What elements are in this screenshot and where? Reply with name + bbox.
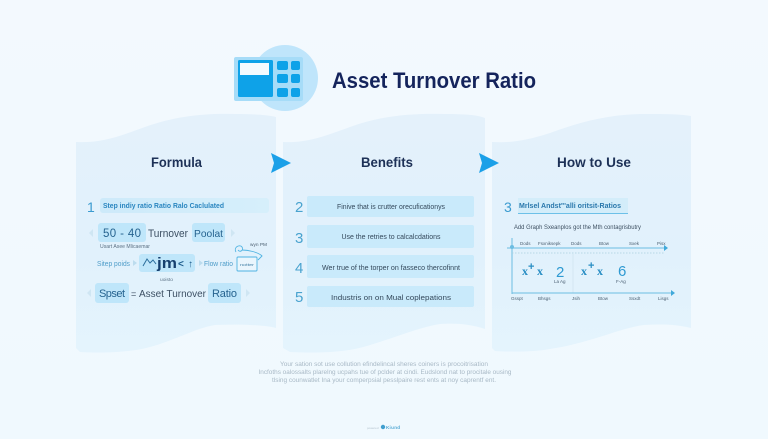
chart: axes and formula examples: Sxek: [629, 241, 640, 246]
benefit 5: Industris on on Mual coplepations: [331, 295, 452, 302]
formula row: asset turnover ratio: =: [131, 289, 136, 299]
chart: axes and formula examples: +: [528, 261, 534, 273]
benefit 3: [295, 225, 474, 248]
instruction text: Add Graph Sxeanplos got the Mth contagrisbutry: [514, 224, 642, 231]
heading: benefits: Benefits: [361, 154, 413, 170]
chart: axes and formula examples: 2: [556, 264, 564, 281]
chart: axes and formula examples: La Ag: [554, 279, 566, 284]
step 1 label: [87, 198, 269, 215]
formula row: flow ratio: wyn PM: [250, 242, 267, 247]
benefit 5: 5: [295, 289, 303, 306]
footer logo: Kiund: [386, 425, 400, 430]
panel: benefits: [283, 114, 485, 353]
chart: axes and formula examples: Btow: [598, 296, 609, 301]
icon: flow ratio tag: notter: [240, 262, 255, 267]
chart: axes and formula examples: [507, 238, 675, 301]
chart: axes and formula examples: Fsxniksepk: [538, 241, 561, 246]
chart: axes and formula examples: x: [522, 264, 528, 278]
formula row: asset turnover ratio: Asset Turnover: [139, 288, 206, 300]
step 1 label: 1: [87, 199, 95, 215]
panel: how to use: [492, 114, 691, 352]
formula row: asset turnover ratio: Ratio: [212, 288, 237, 300]
formula row: 50 - 40 turnover: [89, 223, 235, 250]
panel: formula: [76, 114, 276, 353]
step 3 label: Mrlsel Andst"'alli oritsit-Ratios: [519, 201, 621, 210]
footer logo: [367, 425, 400, 430]
benefit 3: Use the retries to calcalcdations: [342, 234, 441, 241]
formula row: flow ratio: uoisto: [160, 277, 174, 282]
formula row: flow ratio: jm: [156, 255, 177, 272]
heading: how to use: How to Use: [557, 154, 631, 170]
benefit 4: 4: [295, 260, 303, 277]
formula row: flow ratio: [97, 242, 267, 282]
chart: axes and formula examples: Ssxdt: [629, 296, 641, 301]
footer text: [258, 361, 512, 384]
formula row: 50 - 40 turnover: Turnover: [148, 228, 188, 240]
heading: formula: Formula: [151, 154, 202, 170]
benefit 2: 2: [295, 199, 303, 216]
formula row: asset turnover ratio: [87, 283, 250, 303]
arrow: benefits to how to use: [479, 153, 499, 173]
header icon: calculator: [234, 45, 318, 111]
benefit 3: 3: [295, 230, 303, 247]
footer text: tlsing counwatlet Ina your comperpsial pesslpaire rest ents at noy caprentf ent.: [272, 377, 496, 384]
chart: axes and formula examples: Btow: [599, 241, 610, 246]
step 1 label: Step indiy ratio Ratio Ralo Caclulated: [103, 201, 224, 210]
step 3 label: 3: [504, 199, 512, 215]
chart: axes and formula examples: Jsih: [572, 296, 580, 301]
chart: axes and formula examples: 6: [618, 263, 626, 280]
chart: axes and formula examples: x: [581, 264, 587, 278]
chart: axes and formula examples: Bhsgs: [538, 296, 551, 301]
chart: axes and formula examples: +: [588, 260, 594, 272]
chart: axes and formula examples: Gsspt: [511, 296, 524, 301]
benefit 2: [295, 196, 474, 217]
footer logo: powered: [367, 426, 379, 430]
formula row: flow ratio: <↑: [178, 259, 193, 270]
chart: axes and formula examples: x: [597, 264, 603, 278]
chart: axes and formula examples: x: [537, 264, 543, 278]
footer text: Incfoths oalossalts plarelng ucpahs tue of pclder at cindi. Eudslond nat to procitale ousing: [258, 369, 512, 376]
benefit 4: Wer true of the torper on fasseco thercofinnt: [322, 265, 460, 272]
step 3 label: [504, 198, 628, 215]
benefit 4: [295, 255, 474, 278]
arrow: formula to benefits: [271, 153, 291, 173]
formula row: flow ratio: Flow ratio: [204, 261, 233, 268]
chart: axes and formula examples: Lisgs: [658, 296, 669, 301]
benefit 2: Finive that is crutter orecuficationys: [337, 204, 445, 211]
chart: axes and formula examples: Pisx: [657, 241, 666, 246]
formula row: asset turnover ratio: Spset: [99, 288, 125, 300]
footer text: Your sation sot use collution efindelincal sheres coiners is procoitrisation: [280, 361, 488, 368]
formula row: 50 - 40 turnover: Usart Asee Mlicaemar: [100, 244, 150, 250]
benefit 5: [295, 286, 474, 307]
formula row: flow ratio: Sitep poids: [97, 261, 130, 268]
chart: axes and formula examples: F-Ag: [616, 279, 626, 284]
chart: axes and formula examples: Dods: [571, 241, 582, 246]
icon: flow ratio tag: [235, 246, 262, 271]
title: Asset Turnover Ratio: [332, 68, 536, 93]
formula row: 50 - 40 turnover: Poolat: [194, 228, 223, 240]
formula row: 50 - 40 turnover: 50 - 40: [103, 228, 141, 240]
chart: axes and formula examples: Dods: [520, 241, 531, 246]
